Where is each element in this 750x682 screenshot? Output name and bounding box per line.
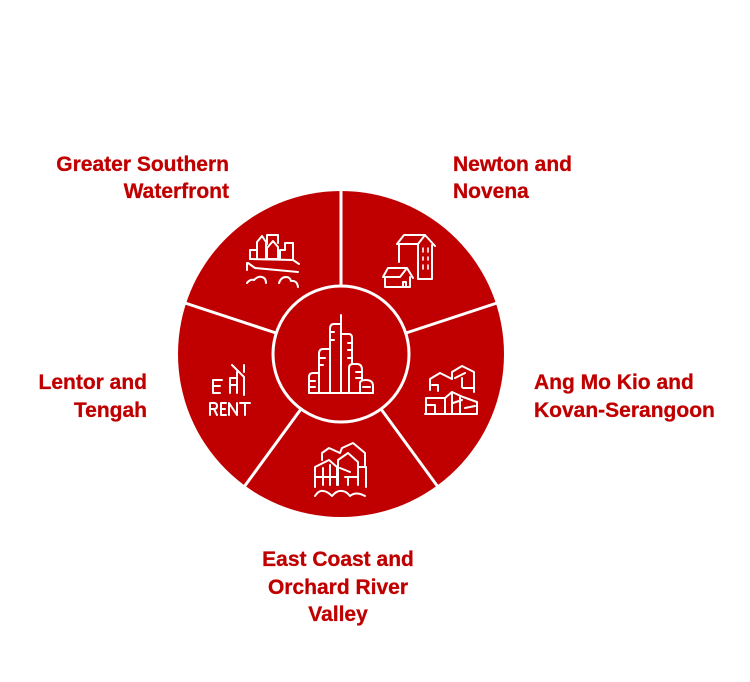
icon: rent [210, 365, 250, 415]
icon: skyline [309, 315, 373, 393]
label: Newton and Novena: Novena [453, 180, 529, 203]
segment dividers [185, 190, 497, 487]
icon: waterfront [247, 235, 299, 287]
icon: buildings [383, 235, 435, 287]
label: Greater Southern Waterfront: Greater Southern [56, 153, 229, 176]
label: Lentor and Tengah: Tengah [74, 399, 147, 422]
label: Newton and Novena: Newton and [453, 153, 572, 176]
rent label [210, 403, 250, 415]
label: Greater Southern Waterfront: Waterfront [124, 180, 229, 203]
centre circle [273, 286, 409, 422]
wheel [178, 190, 504, 517]
label: Ang Mo Kio and Kovan-Serangoon: Kovan-Serangoon [534, 399, 715, 422]
icon: waterside houses [315, 443, 366, 496]
label: Ang Mo Kio and Kovan-Serangoon: Ang Mo Kio and [534, 371, 694, 394]
label: Lentor and Tengah: Lentor and [38, 371, 147, 394]
icon: houses [425, 366, 477, 414]
label: East Coast and Orchard River Valley: East Coast and [262, 548, 414, 571]
label: East Coast and Orchard River Valley: Orchard River [268, 576, 408, 599]
label: East Coast and Orchard River Valley: Valley [308, 603, 368, 626]
wheel disc [178, 191, 504, 517]
rent building [213, 365, 244, 395]
